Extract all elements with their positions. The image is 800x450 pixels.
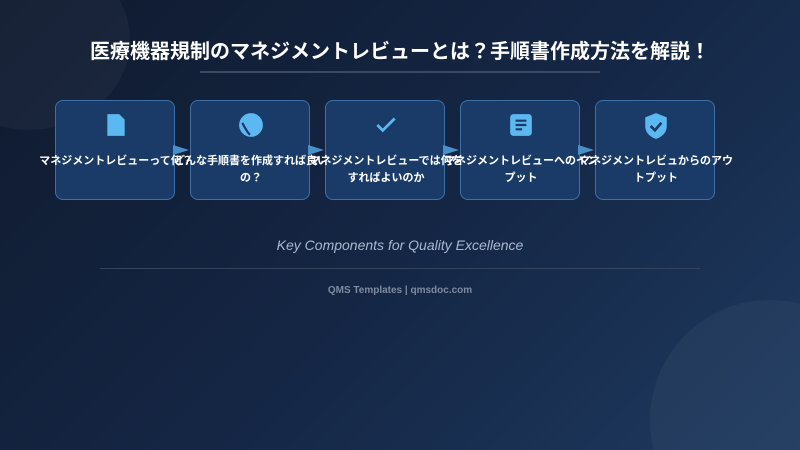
card 5: マネジメントレビュからのアウトプット: [579, 155, 733, 184]
arrow 2: [308, 145, 324, 155]
card 3: マネジメントレビューでは何をすればよいのか: [309, 155, 463, 184]
title: 医療機器規制のマネジメントレビューとは？手順書作成方法を解説！: [90, 41, 710, 63]
card 2: [190, 100, 310, 200]
arrow 4: [578, 145, 594, 155]
card 2: どんな手順書を作成すれば良いの？: [174, 155, 328, 184]
subtitle: Key Components for Quality Excellence: [277, 237, 523, 253]
arrow 1: [173, 145, 189, 155]
arrow 3: [443, 145, 459, 155]
card 3: [325, 100, 445, 200]
card 4: [460, 100, 580, 200]
card 1: マネジメントレビューって何？: [39, 155, 193, 167]
footer: QMS Templates | qmsdoc.com: [328, 285, 472, 296]
card 1: [55, 100, 175, 200]
card 4: マネジメントレビューへのインプット: [444, 155, 598, 184]
card 5: [595, 100, 715, 200]
